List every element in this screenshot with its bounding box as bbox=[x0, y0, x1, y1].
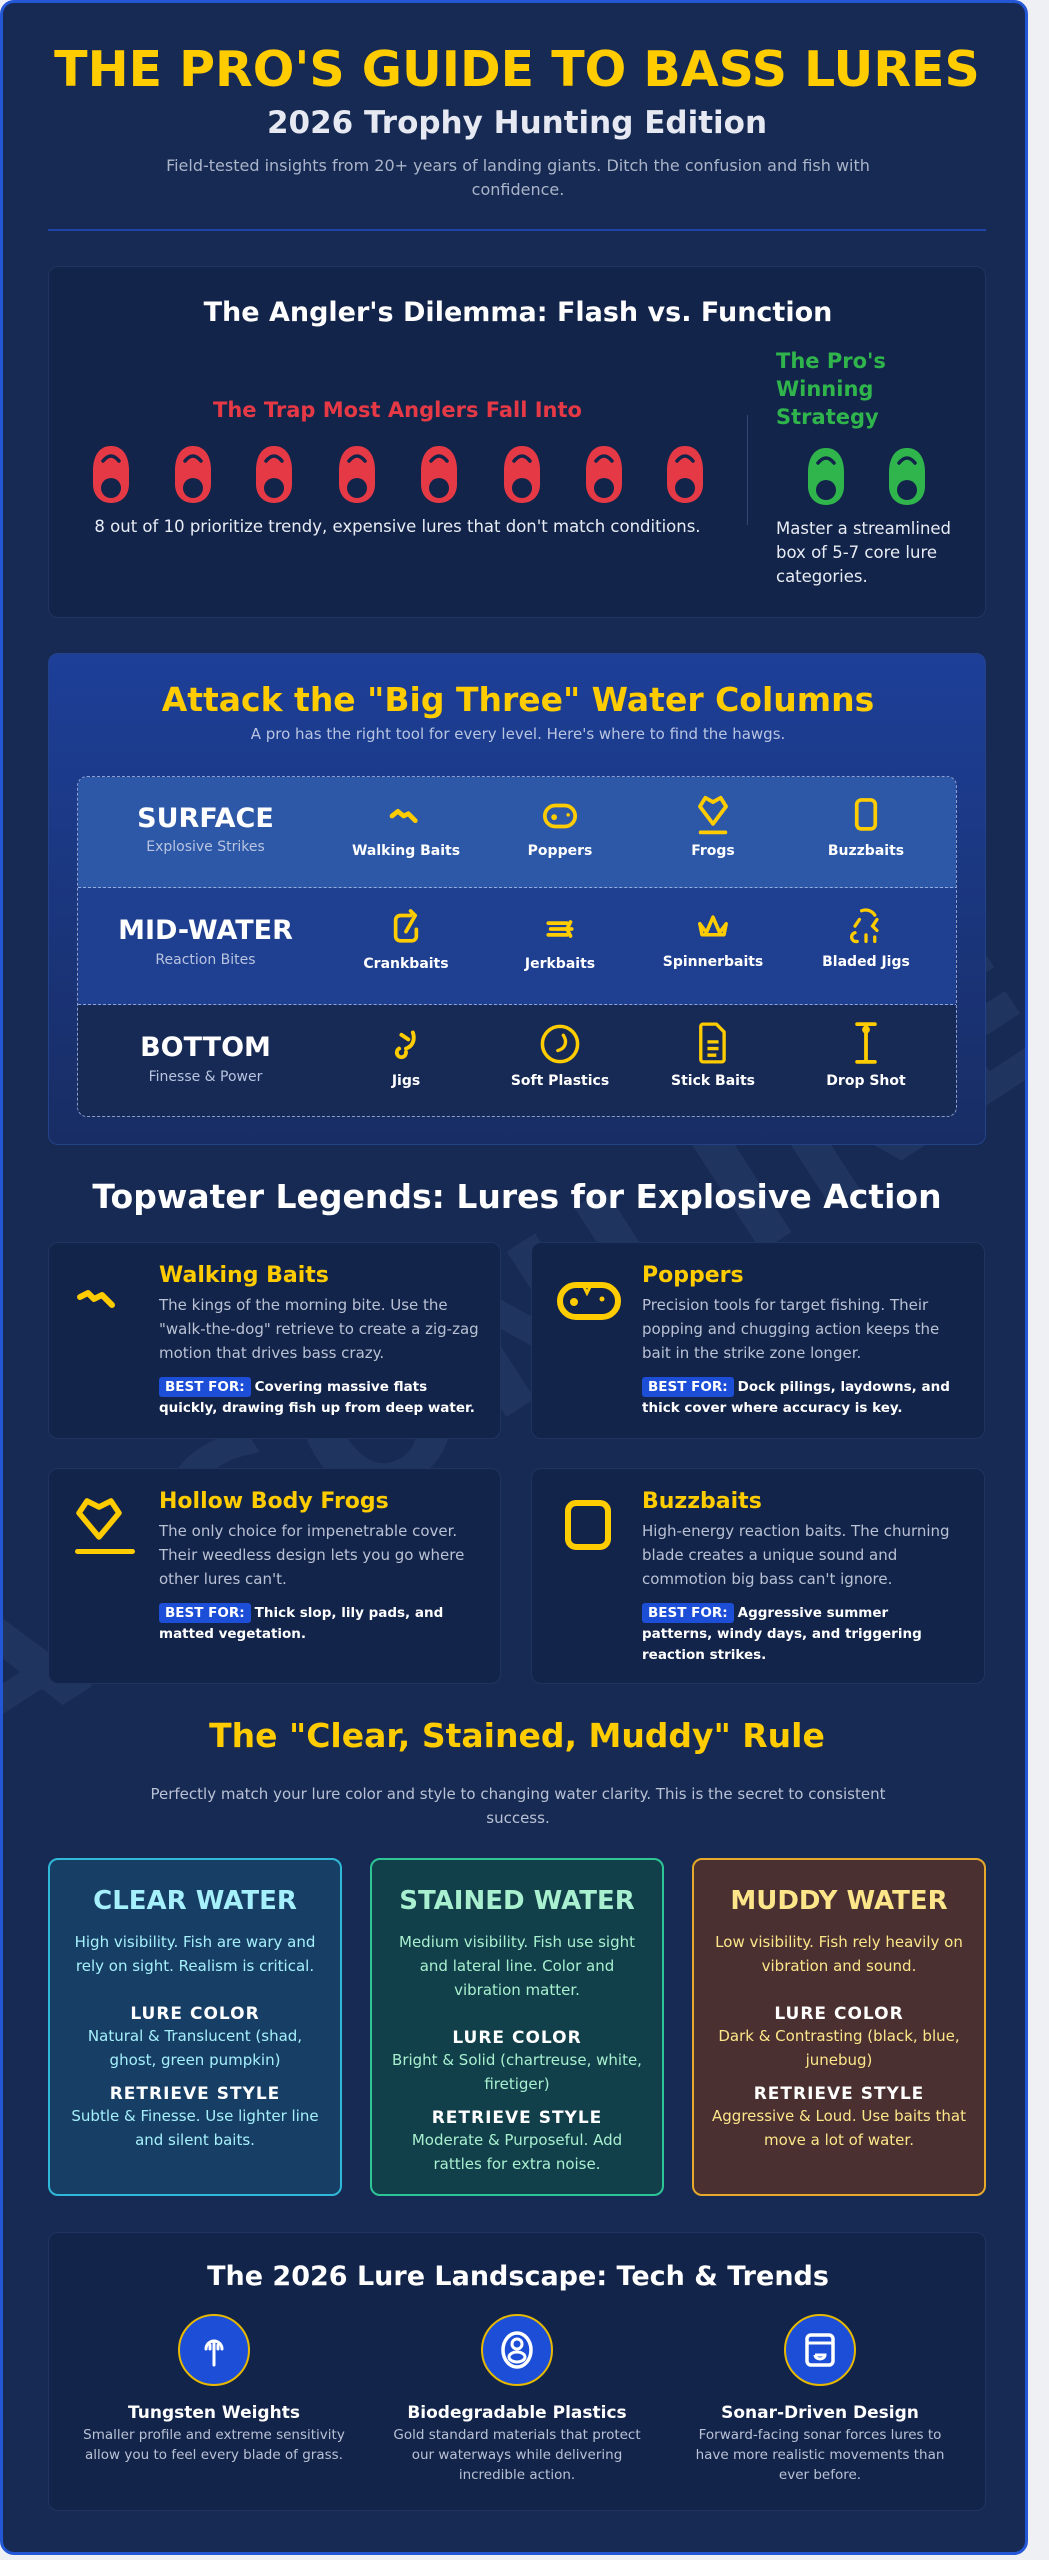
card: stained water: STAINED WATER bbox=[399, 1886, 635, 1916]
panel: water columns bbox=[48, 653, 986, 1145]
icon: frog bbox=[75, 1498, 135, 1554]
lure: walking baits bbox=[352, 808, 460, 859]
trend: biodegradable: Gold standard materials that protect our waterways while delivering incredible action. bbox=[393, 2427, 641, 2483]
card: muddy water: Dark & Contrasting (black, blue, junebug) bbox=[718, 2027, 960, 2069]
clarity subtitle: Perfectly match your lure color and style to changing water clarity. This is the secret to consistent success. bbox=[150, 1785, 885, 1827]
card: clear water: Subtle & Finesse. Use lighter line and silent baits. bbox=[71, 2107, 319, 2149]
card: muddy water: RETRIEVE STYLE bbox=[754, 2084, 924, 2104]
lure: crankbaits: Crankbaits bbox=[363, 956, 449, 972]
lure: walking baits: Walking Baits bbox=[352, 843, 460, 859]
trend: tungsten: Tungsten Weights bbox=[128, 2403, 300, 2423]
card: poppers: Poppers bbox=[642, 1263, 744, 1288]
card: stained water: Medium visibility. Fish use sight and lateral line. Color and vibration matter. bbox=[399, 1933, 635, 1999]
card: poppers bbox=[531, 1242, 985, 1439]
trend: tungsten bbox=[83, 2314, 345, 2463]
lure: drop shot: Drop Shot bbox=[826, 1073, 906, 1089]
lure: poppers bbox=[528, 804, 592, 859]
card: stained water: RETRIEVE STYLE bbox=[432, 2108, 602, 2128]
card: frogs: Hollow Body Frogs bbox=[159, 1489, 389, 1514]
columns subtitle: A pro has the right tool for every level. Here's where to find the hawgs. bbox=[251, 725, 785, 743]
lure: soft plastics: Soft Plastics bbox=[511, 1073, 609, 1089]
card: stained water bbox=[370, 1858, 664, 2196]
lure: buzzbaits: Buzzbaits bbox=[828, 843, 904, 859]
lure: stick baits bbox=[671, 1022, 755, 1089]
card: muddy water: Low visibility. Fish rely heavily on vibration and sound. bbox=[715, 1933, 963, 1975]
lure: drop shot bbox=[826, 1022, 906, 1089]
row: surface: SURFACE bbox=[137, 803, 274, 834]
icon: buzzbait bbox=[565, 1500, 611, 1550]
lure: buzzbaits bbox=[828, 798, 904, 859]
lure: poppers: Poppers bbox=[528, 843, 592, 859]
icon: popper bbox=[557, 1282, 621, 1320]
pro strategy heading: The Pro's Winning Strategy bbox=[776, 349, 886, 429]
card: stained water: LURE COLOR bbox=[452, 2028, 582, 2048]
card: muddy water bbox=[692, 1858, 986, 2196]
pro strategy text: Master a streamlined box of 5-7 core lure categories. bbox=[776, 519, 951, 586]
card: clear water: RETRIEVE STYLE bbox=[110, 2084, 280, 2104]
card: muddy water: MUDDY WATER bbox=[730, 1886, 948, 1916]
card: buzzbaits: BEST FOR: Aggressive summer patterns, windy days, and triggering reaction strikes. bbox=[642, 1605, 922, 1663]
card: frogs: The only choice for impenetrable cover. Their weedless design lets you go where other lures can't. bbox=[159, 1522, 464, 1588]
card: stained water: Bright & Solid (chartreuse, white, firetiger) bbox=[392, 2051, 642, 2093]
card: clear water: Natural & Translucent (shad, ghost, green pumpkin) bbox=[88, 2027, 302, 2069]
card: walking baits: BEST FOR: Covering massive flats quickly, drawing fish up from deep water. bbox=[159, 1379, 475, 1416]
green lure icons bbox=[808, 448, 925, 505]
lure: spinnerbaits bbox=[663, 915, 763, 970]
lure: jerkbaits bbox=[524, 920, 595, 972]
subtitle: 2026 Trophy Hunting Edition bbox=[267, 105, 767, 141]
trend: sonar: Forward-facing sonar forces lures to have more realistic movements than ever before. bbox=[696, 2427, 944, 2483]
card: clear water bbox=[48, 1858, 342, 2196]
trend: biodegradable: Biodegradable Plastics bbox=[407, 2403, 627, 2423]
lure: bladed jigs bbox=[822, 908, 910, 970]
card: walking baits bbox=[48, 1242, 501, 1439]
row: mid-water: Reaction Bites bbox=[155, 952, 256, 968]
row: surface bbox=[78, 777, 958, 888]
row: surface: Explosive Strikes bbox=[146, 839, 265, 855]
row: mid-water bbox=[78, 888, 958, 1005]
panel: dilemma bbox=[48, 266, 986, 618]
trend: biodegradable bbox=[393, 2314, 641, 2483]
card: frogs bbox=[48, 1468, 501, 1684]
card: buzzbaits: Buzzbaits bbox=[642, 1489, 762, 1514]
row: bottom: BOTTOM bbox=[140, 1032, 271, 1063]
lure: spinnerbaits: Spinnerbaits bbox=[663, 954, 763, 970]
card: buzzbaits bbox=[531, 1468, 985, 1684]
lure: jerkbaits: Jerkbaits bbox=[525, 956, 595, 972]
topwater heading: Topwater Legends: Lures for Explosive Action bbox=[92, 1177, 942, 1216]
columns heading: Attack the "Big Three" Water Columns bbox=[162, 680, 874, 719]
card: frogs: BEST FOR: Thick slop, lily pads, and matted vegetation. bbox=[159, 1605, 443, 1642]
red lure icons bbox=[93, 446, 703, 503]
trend: sonar bbox=[696, 2314, 944, 2483]
card: clear water: High visibility. Fish are wary and rely on sight. Realism is critical. bbox=[75, 1933, 315, 1975]
lure: bladed jigs: Bladed Jigs bbox=[822, 954, 910, 970]
card: stained water: Moderate & Purposeful. Add rattles for extra noise. bbox=[412, 2131, 622, 2173]
title: THE PRO'S GUIDE TO BASS LURES bbox=[54, 41, 980, 98]
dilemma heading: The Angler's Dilemma: Flash vs. Function bbox=[204, 297, 832, 328]
card: muddy water: Aggressive & Loud. Use baits that move a lot of water. bbox=[712, 2107, 966, 2149]
lure: jigs: Jigs bbox=[392, 1073, 420, 1089]
trend: sonar: Sonar-Driven Design bbox=[721, 2403, 919, 2423]
card: clear water: CLEAR WATER bbox=[93, 1886, 297, 1916]
icon: walking bait bbox=[77, 1290, 115, 1308]
trap caption: 8 out of 10 prioritize trendy, expensive lures that don't match conditions. bbox=[94, 517, 701, 536]
lure: stick baits: Stick Baits bbox=[671, 1073, 755, 1089]
panel: trends bbox=[48, 2232, 986, 2511]
tagline: Field-tested insights from 20+ years of landing giants. Ditch the confusion and fish with confidence. bbox=[166, 156, 870, 199]
clarity heading: The "Clear, Stained, Muddy" Rule bbox=[209, 1716, 825, 1755]
row: mid-water: MID-WATER bbox=[118, 915, 293, 946]
card: muddy water: LURE COLOR bbox=[774, 2004, 904, 2024]
row: bottom: Finesse & Power bbox=[149, 1069, 262, 1085]
lure: jigs bbox=[391, 1030, 420, 1089]
table bbox=[77, 776, 957, 1117]
card: walking baits: The kings of the morning bite. Use the "walk-the-dog" retrieve to create a zig-zag motion that drives bass crazy. bbox=[159, 1296, 479, 1362]
lure: frogs: Frogs bbox=[691, 843, 735, 859]
trap heading: The Trap Most Anglers Fall Into bbox=[213, 398, 582, 422]
card: clear water: LURE COLOR bbox=[130, 2004, 260, 2024]
card: poppers: BEST FOR: Dock pilings, laydowns, and thick cover where accuracy is key. bbox=[642, 1379, 950, 1416]
card: poppers: Precision tools for target fishing. Their popping and chugging action keeps the bait in the strike zone longer. bbox=[642, 1296, 939, 1362]
trends heading: The 2026 Lure Landscape: Tech & Trends bbox=[207, 2261, 829, 2292]
trend: tungsten: Smaller profile and extreme sensitivity allow you to feel every blade of grass. bbox=[83, 2427, 345, 2463]
lure: crankbaits bbox=[363, 909, 449, 972]
lure: frogs bbox=[691, 796, 735, 859]
card: buzzbaits: High-energy reaction baits. The churning blade creates a unique sound and commotion big bass can't ignore. bbox=[642, 1522, 950, 1588]
lure: soft plastics bbox=[511, 1024, 609, 1089]
row: bottom bbox=[78, 1005, 958, 1118]
card: walking baits: Walking Baits bbox=[159, 1263, 329, 1288]
